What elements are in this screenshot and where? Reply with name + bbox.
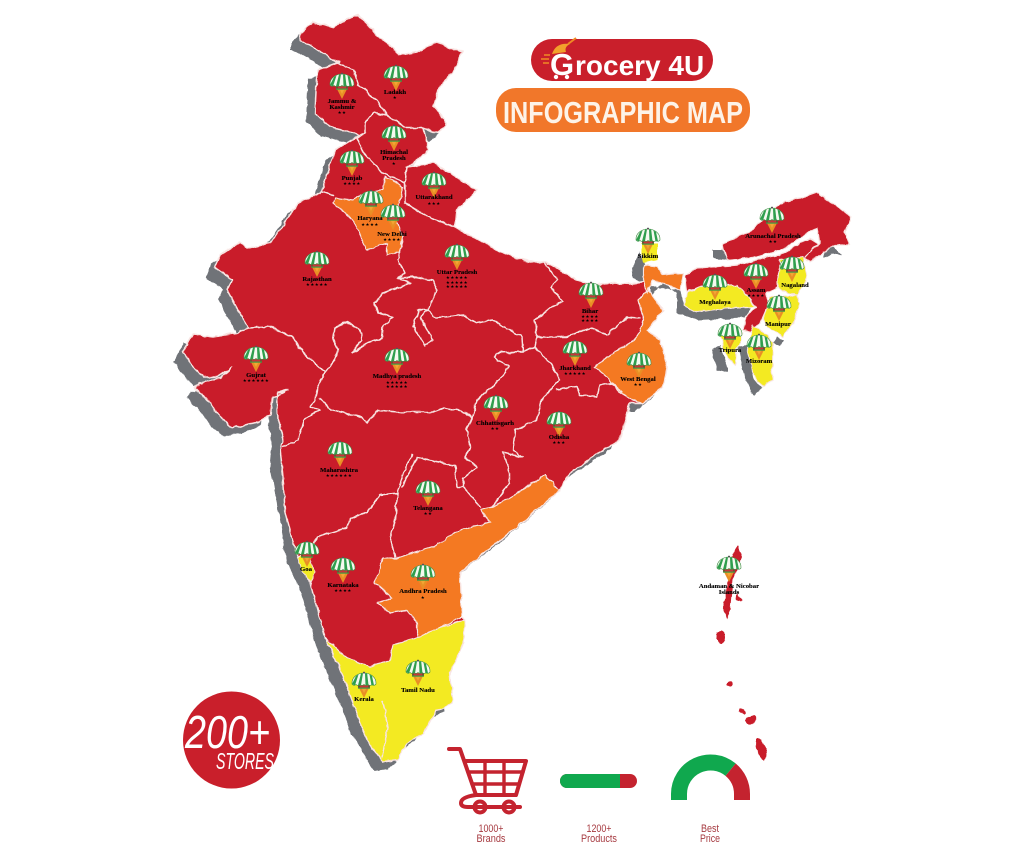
- pin: gujarat: [243, 346, 269, 384]
- stores badge: [183, 692, 280, 788]
- north east: assam: [685, 238, 818, 332]
- mainland red states: [183, 15, 667, 762]
- india map: [174, 15, 851, 771]
- pin: bihar: [579, 282, 603, 324]
- north east: manipur: [763, 295, 800, 337]
- brand name: rocery 4U: [575, 50, 704, 81]
- label: brands: 1000+: [478, 823, 504, 835]
- pin: tripura: Tripura: [719, 347, 742, 354]
- pin: rajasthan: Rajasthan: [302, 276, 332, 283]
- pin: jammu and kashmir: Jammu &: [328, 98, 357, 105]
- pin: karnataka: ★★★★: [334, 588, 352, 594]
- pin: chhattisgarh: [476, 395, 514, 432]
- icon: shopping cart: [449, 749, 526, 812]
- orange: north bengal strip: [643, 265, 683, 292]
- label: best price: Best: [701, 823, 719, 835]
- pin: karnataka: [327, 557, 359, 594]
- pin: odisha: ★★★: [552, 440, 566, 446]
- pin: himachal pradesh: ★: [392, 161, 396, 167]
- pin: tamil nadu: Tamil Nadu: [401, 687, 435, 694]
- label: products: 1200+: [586, 823, 612, 835]
- pin: arunachal pradesh: Arunachal Pradesh: [745, 233, 801, 240]
- orange: west bengal: [595, 290, 667, 403]
- pin: ladakh: ★: [393, 95, 397, 101]
- heading badge: [496, 88, 750, 132]
- pin: haryana: Haryana: [357, 215, 383, 222]
- pin: west bengal: ★★: [634, 382, 642, 388]
- pin: kerala: [352, 672, 376, 703]
- orange: andhra pradesh: [375, 475, 560, 640]
- pin: bihar: ★★★★: [581, 314, 599, 320]
- label: best price: Price: [700, 833, 720, 845]
- label: best price: [700, 823, 720, 845]
- north east: arunachal pradesh: [722, 192, 851, 262]
- pin: manipur: Manipur: [765, 321, 791, 328]
- pin: madhya pradesh: ★★★★★: [386, 384, 408, 390]
- pin: andhra pradesh: ★: [421, 595, 425, 601]
- north east: nagaland: [777, 257, 807, 295]
- pin: rajasthan: [302, 251, 332, 288]
- pin: new delhi: [377, 204, 407, 243]
- pin: mizoram: [746, 334, 773, 365]
- pin: rajasthan: ★★★★★: [306, 282, 328, 288]
- pin: ladakh: [384, 65, 408, 101]
- pin: meghalaya: Meghalaya: [699, 299, 731, 306]
- pin: tamil nadu: [401, 660, 435, 694]
- bar: products: [560, 774, 637, 788]
- pin: uttar pradesh: ★★★★★: [446, 280, 468, 286]
- pin: sikkim: [636, 228, 660, 260]
- pin: assam: ★★★★: [747, 293, 765, 299]
- label: brands: [476, 823, 506, 845]
- stores badge: STORES: [216, 748, 274, 774]
- north east: mizoram: [747, 325, 773, 387]
- pin: gujarat: Gujrat: [246, 372, 267, 379]
- andaman and nicobar islands: [716, 545, 769, 761]
- pin: west bengal: West Bengal: [620, 376, 656, 383]
- pin: new delhi: New Delhi: [377, 231, 407, 238]
- pin: uttarakhand: [415, 172, 453, 207]
- pin: west bengal: [620, 352, 656, 388]
- pin: jharkhand: Jharkhand: [559, 365, 591, 372]
- pin: manipur: [765, 295, 791, 328]
- label: products: [581, 823, 617, 845]
- label: products: Products: [581, 833, 617, 845]
- brand name: G: [550, 47, 574, 82]
- pin: haryana: [357, 190, 383, 228]
- pin: punjab: [340, 150, 364, 187]
- pin: maharashtra: ★★★★★★: [326, 473, 352, 479]
- pin: kerala: Kerala: [354, 696, 374, 703]
- pin: odisha: [547, 411, 571, 446]
- yellow: kerala and tamil nadu: [325, 620, 465, 762]
- pin: maharashtra: Maharashtra: [320, 467, 359, 474]
- pin: maharashtra: [320, 441, 359, 479]
- pin: madhya pradesh: [373, 348, 422, 390]
- pin: tripura: [718, 323, 742, 354]
- pin: andaman and nicobar: Islands: [719, 589, 740, 596]
- pin: madhya pradesh: Madhya pradesh: [373, 373, 422, 380]
- pin: goa: [295, 541, 319, 573]
- pin: bihar: Bihar: [582, 308, 598, 315]
- gauge: best price: [679, 762, 742, 800]
- pin: ladakh: Ladakh: [384, 89, 406, 96]
- pin: uttarakhand: Uttarakhand: [415, 194, 453, 201]
- label: brands: Brands: [476, 833, 506, 845]
- pin: uttar pradesh: ★★★★★: [446, 275, 468, 281]
- stores badge: 200+: [184, 706, 270, 758]
- icon: cart swoosh: [541, 38, 576, 79]
- logo badge: [531, 38, 713, 82]
- yellow: goa: [297, 553, 315, 582]
- pin: uttar pradesh: [437, 244, 478, 290]
- pin: telangana: [413, 480, 443, 517]
- north east: tripura: [720, 333, 743, 365]
- map drop shadow: [174, 24, 842, 771]
- pin: andhra pradesh: Andhra Pradesh: [399, 588, 447, 595]
- pin: bihar: ★★★★: [581, 318, 599, 324]
- pin: mizoram: Mizoram: [746, 358, 773, 365]
- pin: jharkhand: ★★★★★: [564, 371, 586, 377]
- pin: assam: [744, 263, 768, 299]
- pin: andhra pradesh: [399, 564, 447, 601]
- pin: uttar pradesh: Uttar Pradesh: [437, 269, 478, 276]
- pin: jammu and kashmir: Kashmir: [329, 104, 355, 111]
- pin: odisha: Odisha: [549, 434, 570, 441]
- pin: chhattisgarh: ★★: [491, 426, 499, 432]
- pin: uttarakhand: ★★★: [427, 201, 441, 207]
- pin: madhya pradesh: ★★★★★: [386, 380, 408, 386]
- pin: haryana: ★★★★: [361, 222, 379, 228]
- north east: meghalaya: [683, 285, 755, 312]
- pin: andaman and nicobar: Andaman & Nicobar: [699, 583, 759, 590]
- pin: arunachal pradesh: ★★: [769, 239, 777, 245]
- pin: assam: Assam: [747, 287, 766, 294]
- pin: sikkim: Sikkim: [638, 253, 659, 260]
- pin: nagaland: [780, 256, 809, 289]
- pin: nagaland: Nagaland: [781, 282, 809, 289]
- pin: himachal pradesh: [380, 125, 408, 167]
- pin: jammu and kashmir: ★★: [338, 110, 346, 116]
- pin: jammu and kashmir: [328, 73, 357, 116]
- pin: uttar pradesh: ★★★★★: [446, 284, 468, 290]
- pin: jharkhand: [559, 340, 591, 377]
- pin: telangana: ★★: [424, 511, 432, 517]
- orange: haryana and delhi: [333, 177, 403, 255]
- pin: himachal pradesh: Pradesh: [382, 155, 406, 162]
- pin: arunachal pradesh: [745, 207, 801, 245]
- pin: punjab: ★★★★: [343, 181, 361, 187]
- pin: gujarat: ★★★★★★: [243, 378, 269, 384]
- pin: andaman and nicobar: [699, 556, 759, 596]
- heading badge: INFOGRAPHIC MAP: [503, 96, 743, 130]
- pin: goa: Goa: [300, 566, 313, 573]
- pin: himachal pradesh: Himachal: [380, 149, 408, 156]
- pin: chhattisgarh: Chhattisgarh: [476, 420, 514, 427]
- pin: new delhi: ★★★★: [383, 237, 401, 243]
- pin: telangana: Telangana: [413, 505, 443, 512]
- pin: karnataka: Karnataka: [327, 582, 359, 589]
- pin: punjab: Punjab: [342, 175, 363, 182]
- pin: meghalaya: [699, 274, 731, 306]
- yellow: sikkim: [642, 243, 658, 263]
